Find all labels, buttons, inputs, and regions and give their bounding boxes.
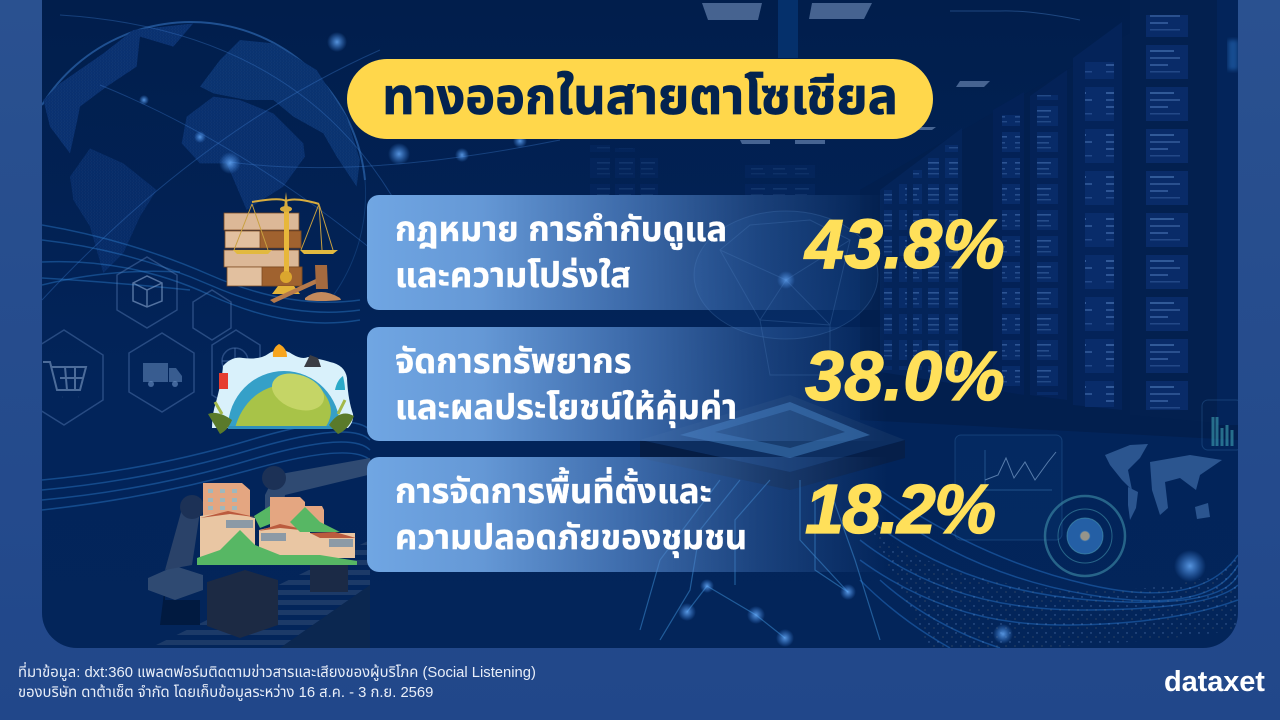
- label: law: และความโปร่งใส: [395, 257, 631, 295]
- panel: law and transparency row: [367, 195, 887, 310]
- label: resources: และผลประโยชน์ให้คุ้มค่า: [395, 389, 737, 427]
- label: community: ความปลอดภัยของชุมชน: [395, 519, 747, 557]
- label: community: การจัดการพื้นที่ตั้งและ: [395, 473, 712, 511]
- value: 38.0%: 38.0%: [805, 337, 1005, 415]
- label: law: [395, 211, 727, 295]
- source text: [18, 662, 536, 701]
- title pill: ทางออกในสายตาโซเชียล: [382, 68, 898, 125]
- glowing data streams bottom right: [860, 490, 1238, 648]
- icon: buildings and greenery: [197, 483, 357, 565]
- neural network brain: [694, 211, 878, 375]
- logo: dataxet: dataxet: [1164, 666, 1265, 698]
- source text: ของบริษัท ดาต้าเซ็ต จำกัด โดยเก็บข้อมูลระหว่าง 16 ส.ค. - 3 ก.ย. 2569: [18, 685, 433, 701]
- label: resources: [395, 343, 737, 428]
- server racks: [590, 0, 1238, 440]
- floating dashboards, chart and radar: [955, 400, 1242, 576]
- flowing data lines on the left: [42, 225, 370, 510]
- icon: law books, scales and gavel: [224, 192, 341, 303]
- world map panel: [1105, 444, 1222, 520]
- panel: resources row: [367, 327, 887, 441]
- label: community: [395, 467, 747, 558]
- value: 18.2%: 18.2%: [805, 470, 994, 548]
- globe with continents: [42, 15, 560, 300]
- label: law: กฎหมาย การกำกับดูแล: [395, 211, 727, 249]
- source text: ที่มาข้อมูล: dxt:360 แพลตฟอร์มติดตามข่าวสารและเสียงของผู้บริโภค (Social Listening): [18, 665, 536, 681]
- value: 43.8%: 43.8%: [805, 205, 1005, 283]
- icon: earth with natural resources: [208, 344, 354, 434]
- central circuit chip: [640, 395, 905, 490]
- label: resources: จัดการทรัพยากร: [395, 343, 632, 381]
- title pill: [347, 59, 933, 139]
- circuit traces with nodes: [640, 480, 880, 647]
- hexagon icons: [24, 257, 260, 425]
- panel: community row: [367, 457, 887, 572]
- conveyor belt and robot arms: [148, 458, 372, 648]
